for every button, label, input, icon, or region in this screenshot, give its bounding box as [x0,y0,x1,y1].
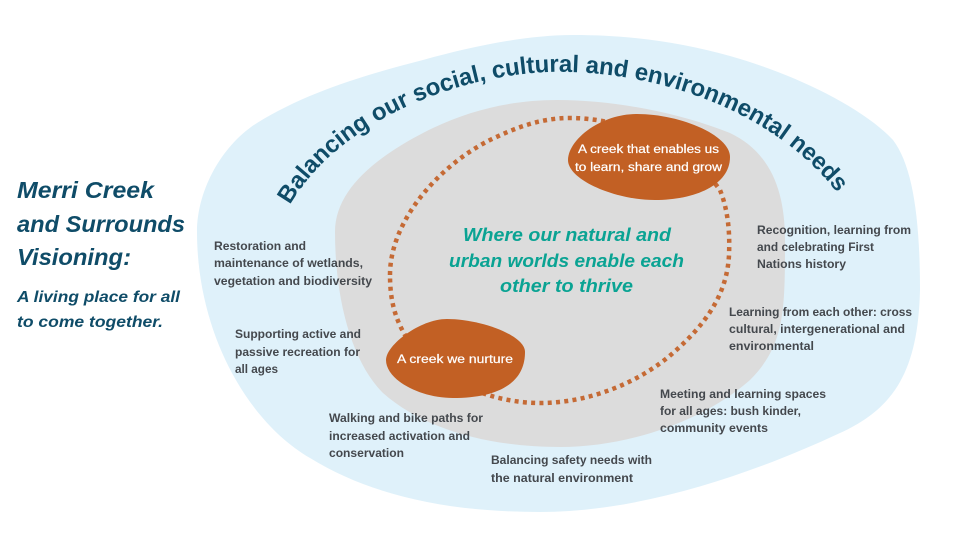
outer blue area: social, cultural and environmental needs [197,35,920,512]
orange blob: we nurture [386,319,525,398]
note: recreation [235,329,361,376]
note: meeting spaces: community events [660,423,768,435]
note: recreation: Supporting active and [235,329,361,341]
central statement [449,225,684,296]
note: learning from each other: environmental [729,341,814,353]
orange blob: learn, share and grow: to learn, share and grow [575,162,723,174]
central statement: other to thrive [500,276,633,296]
dotted circle connecting the two creek roles [390,118,729,403]
note: First Nations [757,225,911,271]
title block [16,177,185,331]
note: restoration [214,241,373,288]
note: First Nations: Nations history [757,259,847,271]
title block: and Surrounds [17,211,185,237]
note: learning from each other: Learning from each other: cross [729,307,912,319]
note: safety: the natural environment [491,473,633,485]
title block: A living place for all [16,289,181,306]
note: recreation: passive recreation for [235,347,361,359]
note: paths [329,413,484,460]
title block: to come together. [17,314,163,331]
note: safety [491,455,652,485]
orange blob: learn, share and grow [568,114,730,200]
note: recreation: all ages [235,364,278,376]
title block: Visioning: [17,244,131,270]
curved heading: Balancing our social, cultural and environmental needs [276,54,845,204]
note: restoration: Restoration and [214,241,306,253]
note: meeting spaces: Meeting and learning spaces [660,389,826,401]
title block: Merri Creek [17,177,155,203]
note: restoration: maintenance of wetlands, [214,258,363,270]
inner grey area [335,100,785,447]
orange blob: we nurture: A creek we nurture [397,354,513,366]
central statement: urban worlds enable each [449,251,684,271]
note: learning from each other [729,307,912,353]
note: meeting spaces: for all ages: bush kinder, [660,406,801,418]
orange blob: learn, share and grow: A creek that enables us [578,144,719,156]
note: paths: increased activation and [329,431,470,443]
central statement: Where our natural and [463,225,672,245]
note: safety: Balancing safety needs with [491,455,652,467]
note: learning from each other: cultural, intergenerational and [729,324,905,336]
note: paths: Walking and bike paths for [329,413,484,425]
note: restoration: vegetation and biodiversity [214,276,373,288]
note: First Nations: and celebrating First [757,242,874,254]
note: paths: conservation [329,448,404,460]
note: First Nations: Recognition, learning from [757,225,911,237]
note: meeting spaces [660,389,826,435]
